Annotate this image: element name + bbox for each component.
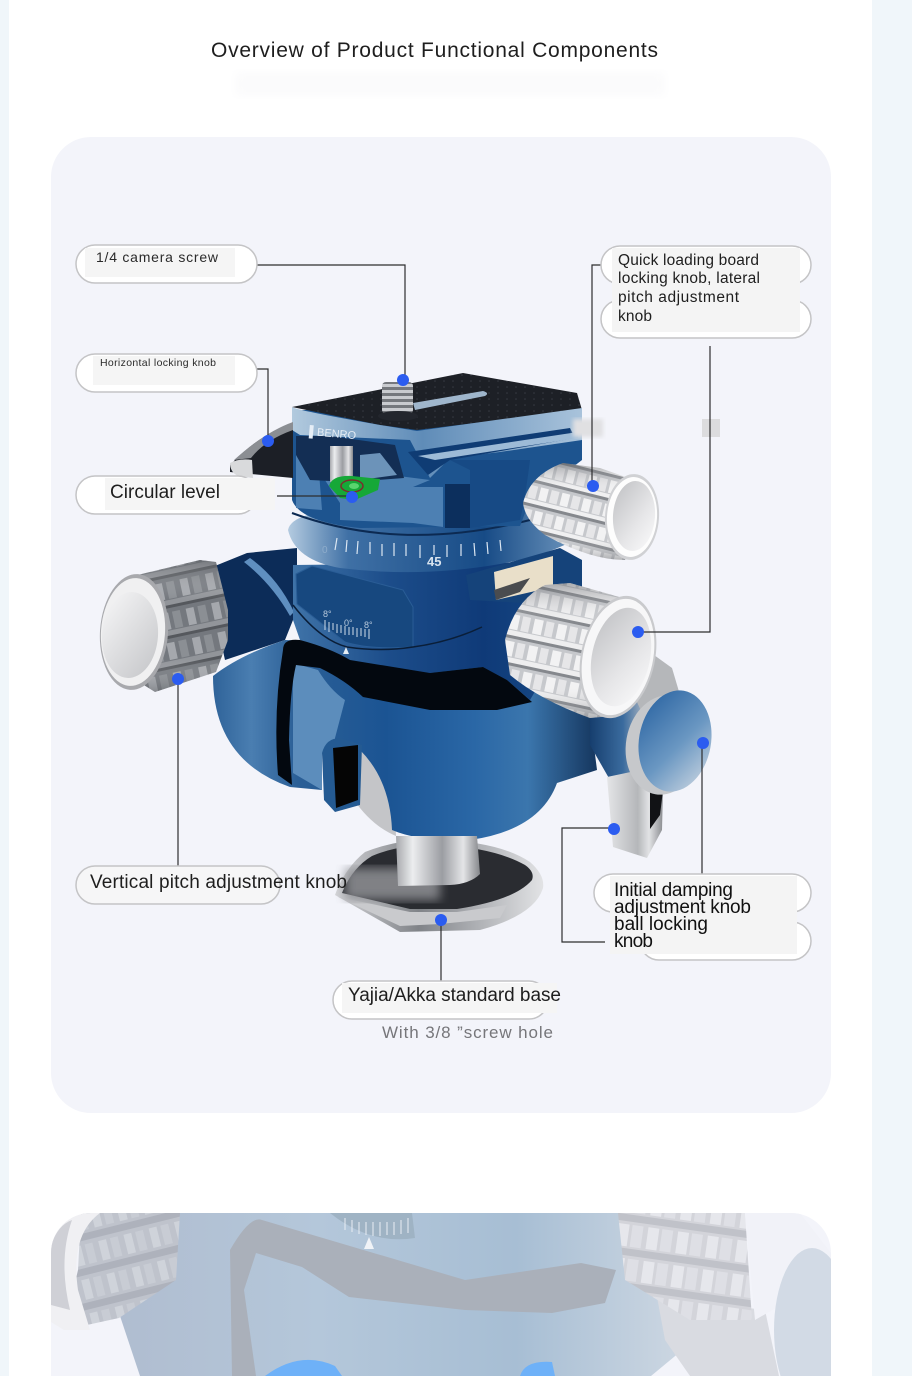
slot <box>322 738 362 812</box>
camera screw <box>382 382 413 414</box>
title <box>211 39 665 96</box>
label: initial damping adjustment knob: adjustment knob <box>614 897 751 918</box>
label: initial damping adjustment knob: ball locking <box>614 914 708 935</box>
pitch scale <box>325 620 369 639</box>
ghost arrow <box>364 1237 374 1249</box>
plate top <box>292 373 582 430</box>
ring angle number: 45 <box>427 554 441 569</box>
label: 1/4 camera screw <box>76 245 257 283</box>
dark saddle <box>276 640 532 785</box>
ball <box>352 750 396 836</box>
ghost left knob <box>76 1213 180 1325</box>
label patches over the product <box>573 419 720 437</box>
label: horizontal locking knob <box>76 354 257 392</box>
post <box>396 836 480 886</box>
label: Yajia/Akka standard base <box>333 981 561 1019</box>
label: quick loading board locking knob <box>601 246 811 338</box>
callout dots <box>172 374 709 926</box>
label: circular level: Circular level <box>110 482 220 503</box>
note: screw hole: With 3/8 ”screw hole <box>382 1023 553 1042</box>
plate front band <box>292 407 582 478</box>
product: tripod head: 8° <box>323 609 332 619</box>
slot in plate <box>413 391 487 410</box>
left knob <box>96 560 228 692</box>
label: Yajia/Akka standard base: Yajia/Akka standard base <box>348 985 561 1006</box>
ghost lever <box>657 1297 779 1376</box>
panel: product diagram <box>51 137 831 1113</box>
ghost saddle <box>230 1219 616 1376</box>
left knob arm <box>205 548 297 660</box>
product: tripod head: 0° <box>344 618 353 628</box>
label: quick loading board locking knob: locking knob, lateral <box>618 270 760 287</box>
ghost scale <box>330 1213 415 1239</box>
horizontal locking knob <box>230 422 293 478</box>
label: quick loading board locking knob: pitch adjustment <box>618 289 740 306</box>
label: quick loading board locking knob: knob <box>618 308 652 325</box>
label: 1/4 camera screw: 1/4 camera screw <box>96 249 219 265</box>
circular level <box>329 476 380 500</box>
label: circular level <box>76 476 275 514</box>
upper right knob <box>523 463 662 562</box>
panel: faded product close-up <box>51 1213 850 1376</box>
product: tripod head: 0 <box>322 545 328 556</box>
inner body panel <box>293 663 345 790</box>
base plate <box>335 840 543 932</box>
ghost blue highlights <box>265 1360 342 1376</box>
label: quick loading board locking knob: Quick loading board <box>618 252 759 269</box>
smudge <box>345 868 440 900</box>
lower body <box>213 640 597 840</box>
side clamp <box>466 548 582 605</box>
damping knob and lever <box>590 655 719 858</box>
opening in block <box>296 436 404 482</box>
leader lines <box>178 265 710 981</box>
scale ticks <box>335 538 501 558</box>
label: vertical pitch adjustment knob: Vertical pitch adjustment knob <box>90 872 347 893</box>
upper block <box>292 410 582 528</box>
product: tripod head: 8° <box>364 620 373 630</box>
brand: ▌BENRO <box>309 424 357 443</box>
label: initial damping adjustment knob <box>594 874 811 960</box>
label: initial damping adjustment knob: knob <box>614 931 653 952</box>
mid section <box>293 562 565 700</box>
label: vertical pitch adjustment knob <box>76 866 347 904</box>
label: initial damping adjustment knob: Initial damping <box>614 880 733 901</box>
rotation ring <box>288 505 590 572</box>
title: Overview of Product Functional Components <box>211 39 658 62</box>
ghost body <box>119 1213 686 1376</box>
label: horizontal locking knob: Horizontal locking knob <box>100 357 216 369</box>
ghost right knob <box>618 1213 752 1320</box>
lower right knob <box>505 583 667 725</box>
product: tripod head <box>96 373 719 932</box>
